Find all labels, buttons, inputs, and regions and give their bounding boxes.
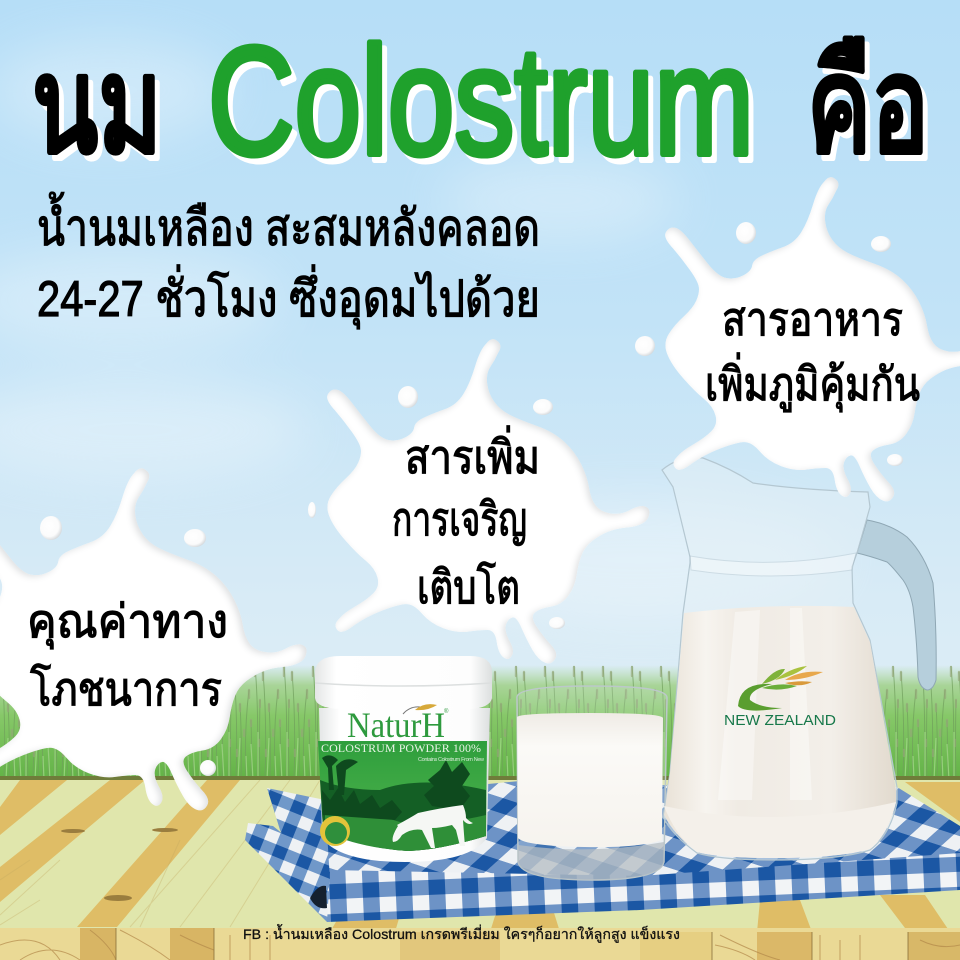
label: growth factors: การเจริญ <box>392 493 527 545</box>
title word: Colostrum: Colostrum <box>208 15 754 187</box>
footer credit: FB : น้ำนมเหลือง Colostrum เกรดพรีเมี่ยม ใครๆก็อยากให้ลูกสูง แข็งแรง <box>243 924 680 943</box>
small product line: Contains Colostrum From New <box>418 757 484 763</box>
label: nutrients: เพิ่มภูมิคุ้มกัน <box>705 352 920 413</box>
brand logo leaves: ® <box>444 708 449 715</box>
title word: milk: นม <box>32 30 162 181</box>
product name: COLOSTRUM POWDER 100% <box>321 741 481 755</box>
jar body <box>319 708 490 862</box>
subtitle: 24-27 ชั่วโมง ซึ่งอุดมไปด้วย <box>37 265 540 329</box>
cloth left lower flap <box>245 823 330 922</box>
label: nutrients: สารอาหาร <box>722 293 903 345</box>
cloth left upper flap <box>267 788 330 880</box>
brand logo leaves <box>403 704 449 715</box>
checkered cloth <box>245 781 960 922</box>
title shadow: นม <box>37 36 167 187</box>
label: growth factors <box>392 425 540 613</box>
dark plants on label <box>322 755 470 820</box>
label: nutritional value: โภชนาการ <box>30 663 222 715</box>
background: wooden table <box>0 776 960 960</box>
dark fold opening <box>310 886 327 908</box>
jar of NaturH colostrum powder <box>315 656 492 862</box>
cow <box>393 805 473 848</box>
label: nutritional value <box>27 595 228 715</box>
jar lid <box>315 656 492 709</box>
cloth upper surface <box>320 781 960 878</box>
label: growth factors: สารเพิ่ม <box>405 425 540 483</box>
subtitle: น้ำนมเหลือง สะสมหลังคลอด <box>37 192 540 256</box>
label: nutrients <box>705 293 920 413</box>
milk splash: left <box>0 468 307 810</box>
cloth front fold <box>327 853 960 922</box>
pitcher handle <box>857 520 936 690</box>
knots in wood <box>61 828 178 901</box>
title shadow: Colostrum <box>213 21 759 193</box>
milk splash: middle <box>308 339 649 663</box>
label: nutritional value: คุณค่าทาง <box>27 595 228 650</box>
milk splash: right <box>635 177 960 501</box>
pitcher milk base <box>664 802 896 858</box>
brand name: NaturH <box>347 705 445 745</box>
subtitle <box>37 192 540 329</box>
milk in glass <box>517 713 663 847</box>
New Zealand logo: NEW ZEALAND <box>724 712 836 729</box>
glass base <box>518 842 664 880</box>
background: grass field <box>0 660 960 778</box>
title <box>32 15 934 193</box>
green label <box>318 741 487 851</box>
quality seal <box>320 816 350 846</box>
glass pitcher of milk <box>662 458 936 860</box>
pitcher milk highlights <box>718 608 812 800</box>
label: growth factors: เติบโต <box>417 561 520 613</box>
New Zealand logo <box>724 666 836 729</box>
pitcher glass <box>662 458 897 860</box>
end-grain row of boards <box>0 928 960 960</box>
pitcher milk <box>664 606 896 858</box>
pitcher collar <box>690 553 856 576</box>
glass outline <box>517 686 667 880</box>
glass of milk <box>517 686 667 880</box>
